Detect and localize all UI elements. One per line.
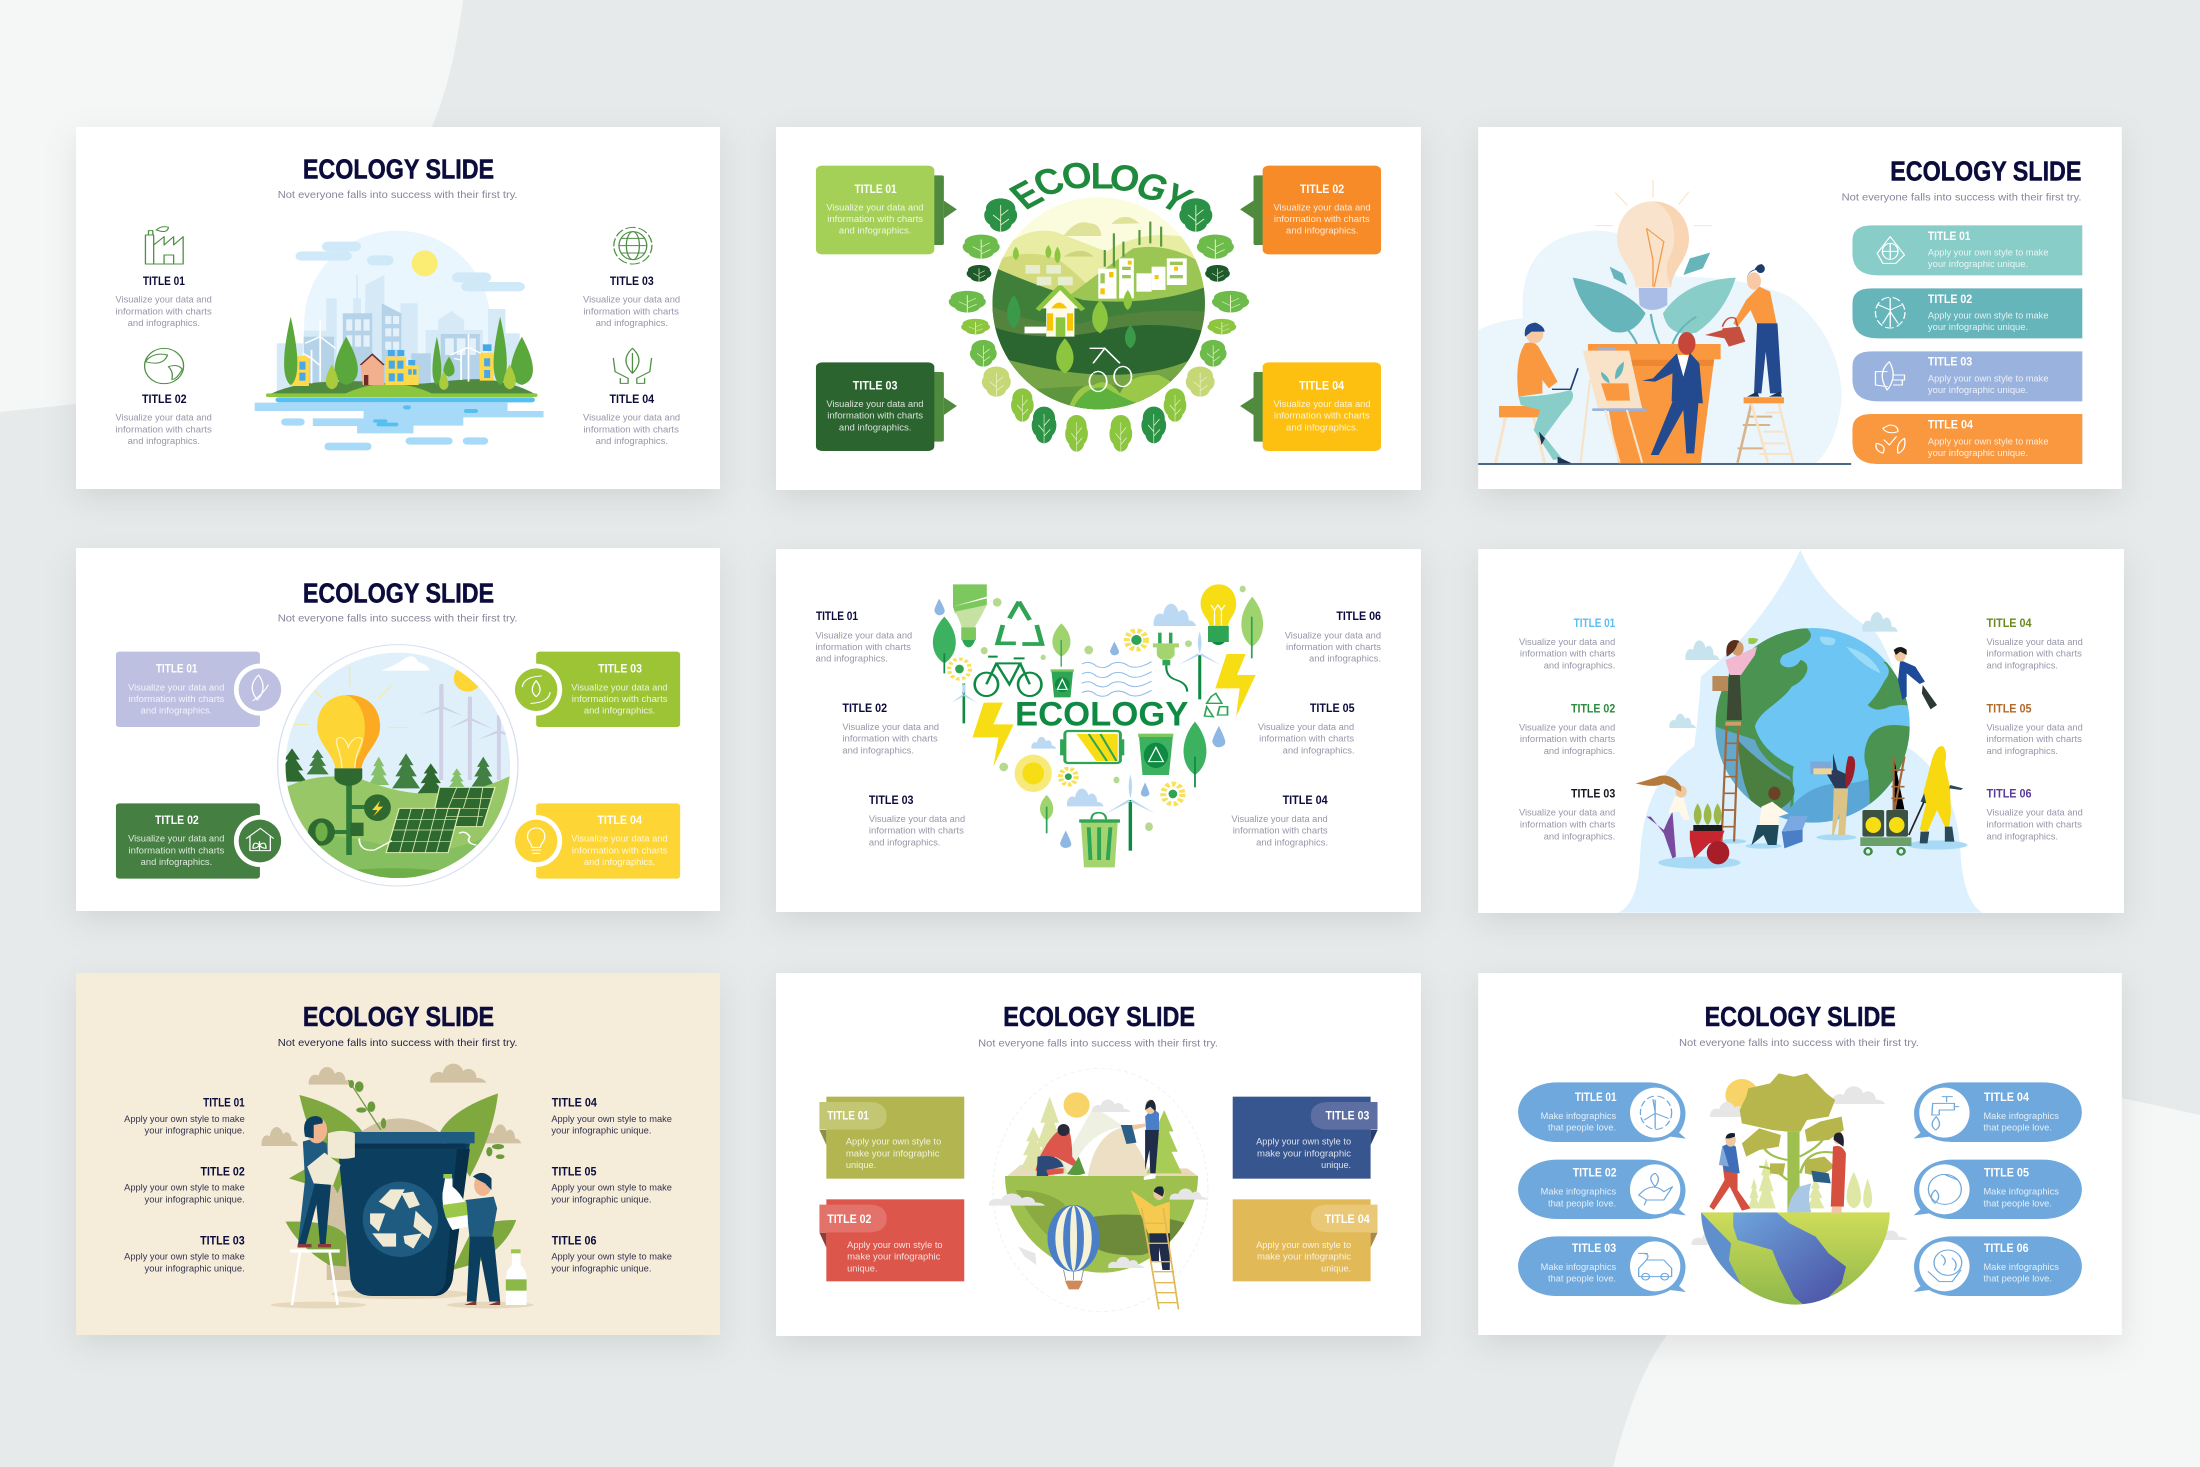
item: title 06: TITLE 06 xyxy=(552,1234,596,1248)
item: title 05 xyxy=(551,1165,672,1205)
item: title 01 xyxy=(1519,617,1616,671)
card: title 03: unique. xyxy=(1321,1160,1351,1171)
card: title 02 xyxy=(1240,166,1381,254)
item: title 04 xyxy=(551,1096,672,1136)
panel 1: city ecology slide xyxy=(76,127,720,489)
panel 2: ecology globe with leaves xyxy=(776,127,1421,490)
item: title 02: and infographics. xyxy=(128,436,200,447)
item: title 01: TITLE 01 xyxy=(1574,617,1615,630)
card: title 03: TITLE 03 xyxy=(598,662,642,676)
bubble: title 06 xyxy=(1914,1236,2082,1296)
item: title 01 xyxy=(116,227,212,329)
heading: ECOLOGY arched: O xyxy=(1057,153,1096,198)
item: title 03: Apply your own style to make xyxy=(124,1252,245,1262)
icon: recycling globe xyxy=(614,227,652,264)
item: title 04: and infographics. xyxy=(1256,838,1328,848)
item: title 06: Visualize your data and xyxy=(1986,808,2083,818)
item: title 04: TITLE 04 xyxy=(609,393,654,406)
item: title 01: Visualize your data and xyxy=(1519,637,1615,648)
card: title 03 xyxy=(816,362,957,451)
card: title 04: make your infographic xyxy=(1257,1252,1352,1262)
bubble: title 06: TITLE 06 xyxy=(1984,1242,2029,1255)
bubble: title 04: that people love. xyxy=(1983,1123,2052,1133)
item: title 06: TITLE 06 xyxy=(1986,787,2032,801)
item: title 01 xyxy=(816,610,912,664)
card: title 04 xyxy=(510,803,680,879)
card: title 04: Apply your own style to xyxy=(1256,1240,1351,1251)
bubble: title 06: that people love. xyxy=(1983,1274,2052,1284)
card: title 03: information with charts xyxy=(827,411,924,421)
item: title 02: TITLE 02 xyxy=(1571,702,1615,716)
item: title 03 xyxy=(869,794,965,848)
bubble: title 05: Make infographics xyxy=(1983,1187,2059,1197)
card: title 02 xyxy=(116,803,286,879)
heading: ECOLOGY arched: E xyxy=(1001,173,1053,218)
card: title 02: information with charts xyxy=(1274,214,1370,225)
item: title 02 xyxy=(1519,702,1616,757)
item: title 03: Visualize your data and xyxy=(1519,808,1615,818)
card: title 02: and infographics. xyxy=(1286,226,1358,236)
item: title 05: TITLE 05 xyxy=(1986,702,2032,716)
heading: ECOLOGY arched: Y xyxy=(1151,176,1200,221)
item: title 03: and infographics. xyxy=(596,318,668,329)
card: title 03: Apply your own style to xyxy=(1256,1137,1351,1147)
heading: ECOLOGY: ECOLOGY xyxy=(1015,694,1189,733)
item: title 05: Apply your own style to make xyxy=(551,1183,672,1193)
item: title 06: information with charts xyxy=(1286,642,1382,653)
card: title 01: unique. xyxy=(846,1160,876,1171)
bar: title 04 xyxy=(1852,414,2082,464)
bubble: title 03: TITLE 03 xyxy=(1572,1242,1616,1255)
card: title 01: Apply your own style to xyxy=(846,1137,941,1147)
card: title 04: TITLE 04 xyxy=(1325,1213,1370,1226)
illustration: green city on island xyxy=(255,231,544,450)
illustration: earth hemisphere with tree xyxy=(1677,1073,1908,1305)
item: title 03 xyxy=(583,227,680,329)
item: title 05: Visualize your data and xyxy=(1258,722,1354,733)
background blob: top left xyxy=(0,0,463,412)
item: title 03: Visualize your data and xyxy=(583,295,680,305)
card: title 03 xyxy=(510,652,680,727)
item: title 04: Visualize your data and xyxy=(1986,637,2083,648)
item: title 05: information with charts xyxy=(1259,734,1355,744)
heading: ECOLOGY SLIDE xyxy=(1705,1001,1896,1032)
bubble: title 05: that people love. xyxy=(1983,1199,2052,1209)
heading: ECOLOGY SLIDE xyxy=(1890,156,2081,187)
subheading: Not everyone falls into success with their first try. xyxy=(278,1037,518,1049)
card: title 02: unique. xyxy=(847,1264,878,1274)
panel 8: planting landscape xyxy=(776,973,1421,1336)
bar: title 02: your infographic unique. xyxy=(1928,322,2028,333)
card: title 02: make your infographic xyxy=(847,1252,941,1262)
bubble: title 01 xyxy=(1518,1082,1686,1142)
bubble: title 03: that people love. xyxy=(1548,1274,1616,1284)
item: title 02: information with charts xyxy=(1520,734,1616,745)
item: title 06 xyxy=(1285,610,1382,664)
card: title 04 xyxy=(1240,362,1381,451)
card: title 04: TITLE 04 xyxy=(597,814,642,827)
item: title 05: Visualize your data and xyxy=(1986,723,2083,733)
item: title 05: and infographics. xyxy=(1986,746,2058,757)
card: title 04: Visualize your data and xyxy=(571,834,668,844)
item: title 02: information with charts xyxy=(116,425,212,435)
item: title 01: and infographics. xyxy=(816,654,888,664)
item: title 03: information with charts xyxy=(869,826,964,836)
bar: title 01: TITLE 01 xyxy=(1928,230,1970,243)
item: title 01 xyxy=(124,1096,245,1136)
item: title 01: TITLE 01 xyxy=(816,610,858,623)
outer ring xyxy=(278,645,518,886)
item: title 03: TITLE 03 xyxy=(200,1234,245,1248)
bubble: title 02 xyxy=(1518,1160,1686,1219)
card: title 02 xyxy=(819,1199,964,1281)
bubble: title 05: TITLE 05 xyxy=(1984,1166,2029,1180)
card: title 02: Apply your own style to xyxy=(847,1240,943,1251)
card: title 04: Visualize your data and xyxy=(1273,399,1371,410)
heading: ECOLOGY SLIDE xyxy=(303,1001,494,1032)
card: title 01: TITLE 01 xyxy=(156,662,197,676)
panel 7: recycling bin xyxy=(76,973,720,1335)
illustration: team growing bulb plant xyxy=(1478,180,1851,465)
bubble: title 02: that people love. xyxy=(1548,1199,1616,1209)
item: title 04: TITLE 04 xyxy=(552,1096,597,1110)
item: title 03: TITLE 03 xyxy=(869,794,914,807)
item: title 05: information with charts xyxy=(1986,734,2082,745)
item: title 04 xyxy=(1231,794,1328,848)
item: title 04: and infographics. xyxy=(596,436,668,447)
item: title 03: information with charts xyxy=(583,307,679,317)
card: title 01: TITLE 01 xyxy=(827,1109,869,1123)
subheading: Not everyone falls into success with their first try. xyxy=(278,189,518,201)
panel 9: earth tree speech bubbles xyxy=(1478,973,2122,1335)
card: title 01: TITLE 01 xyxy=(855,183,897,196)
item: title 02: your infographic unique. xyxy=(145,1195,245,1205)
bar: title 03 xyxy=(1852,351,2082,401)
leaf wreath xyxy=(949,198,1249,452)
bubble: title 04 xyxy=(1914,1082,2082,1142)
card: title 03: TITLE 03 xyxy=(853,379,898,393)
bar: title 02: Apply your own style to make xyxy=(1928,311,2048,321)
subheading: Not everyone falls into success with their first try. xyxy=(1842,192,2081,203)
card: title 01 xyxy=(816,166,957,254)
illustration: globe landscape xyxy=(990,197,1207,410)
item: title 01: information with charts xyxy=(1520,649,1616,659)
card: title 02: TITLE 02 xyxy=(155,814,199,827)
item: title 04: and infographics. xyxy=(1986,661,2058,671)
card: title 03: Visualize your data and xyxy=(826,399,923,410)
bubble: title 01: Make infographics xyxy=(1541,1111,1617,1122)
subheading: Not everyone falls into success with their first try. xyxy=(978,1038,1218,1049)
item: title 02: Visualize your data and xyxy=(842,722,939,733)
panel 5: ecology heart xyxy=(776,549,1421,912)
illustration: solar field and bulb xyxy=(277,652,520,880)
bar: title 04: your infographic unique. xyxy=(1928,448,2028,459)
item: title 06: information with charts xyxy=(1986,820,2082,830)
card: title 01: Visualize your data and xyxy=(128,683,224,693)
item: title 01: and infographics. xyxy=(1544,661,1615,671)
card: title 04: and infographics. xyxy=(584,857,655,868)
subheading: Not everyone falls into success with their first try. xyxy=(278,613,518,624)
subheading: Not everyone falls into success with their first try. xyxy=(1679,1037,1919,1049)
icon: factory xyxy=(145,227,183,264)
card: title 01: Visualize your data and xyxy=(826,203,923,213)
item: title 01: information with charts xyxy=(816,642,911,653)
bar: title 01: Apply your own style to make xyxy=(1928,248,2048,258)
item: title 04: Visualize your data and xyxy=(1231,814,1328,825)
heading: ECOLOGY arched: L xyxy=(1090,155,1114,196)
item: title 02: TITLE 02 xyxy=(142,393,187,406)
item: title 06: TITLE 06 xyxy=(1336,610,1381,623)
item: title 02: and infographics. xyxy=(842,746,914,756)
panel 3: teamwork around idea plant xyxy=(1478,127,2122,489)
heading: ECOLOGY SLIDE xyxy=(1003,1001,1195,1032)
item: title 04: Visualize your data and xyxy=(583,413,680,423)
card: title 04: unique. xyxy=(1321,1264,1351,1274)
bar: title 01 xyxy=(1852,225,2082,275)
heading: ECOLOGY SLIDE xyxy=(303,154,494,185)
item: title 04: information with charts xyxy=(1986,649,2082,659)
item: title 06: your infographic unique. xyxy=(551,1264,652,1274)
item: title 03: and infographics. xyxy=(869,838,940,848)
panel 6: people caring for earth xyxy=(1478,549,2124,913)
icons: heart collage xyxy=(933,584,1263,867)
card: title 02: TITLE 02 xyxy=(827,1213,871,1226)
item: title 03: TITLE 03 xyxy=(1571,787,1615,801)
item: title 02: Visualize your data and xyxy=(1519,723,1615,733)
card: title 03: and infographics. xyxy=(839,423,911,433)
card: title 02: TITLE 02 xyxy=(1300,183,1344,196)
item: title 02: TITLE 02 xyxy=(842,702,887,715)
item: title 04: Apply your own style to make xyxy=(551,1114,672,1125)
card: title 02: Visualize your data and xyxy=(1273,203,1371,213)
bubble: title 02: TITLE 02 xyxy=(1573,1166,1617,1180)
card: title 03: Visualize your data and xyxy=(571,683,668,693)
item: title 04: information with charts xyxy=(1233,826,1328,836)
item: title 06 xyxy=(551,1234,672,1274)
heading: ECOLOGY SLIDE xyxy=(303,577,494,608)
bar: title 03: your infographic unique. xyxy=(1928,385,2028,396)
background blob: bottom right xyxy=(1613,1098,2200,1467)
bubble: title 01: TITLE 01 xyxy=(1575,1091,1617,1104)
card: title 01: make your infographic xyxy=(846,1149,940,1159)
item: title 06: and infographics. xyxy=(1309,654,1381,664)
item: title 01: TITLE 01 xyxy=(143,275,185,288)
card: title 04: and infographics. xyxy=(1286,423,1358,433)
illustration: figures around earth xyxy=(1636,638,1967,869)
bar: title 02: TITLE 02 xyxy=(1928,293,1972,306)
card: title 01 xyxy=(116,652,286,727)
bar: title 03: Apply your own style to make xyxy=(1928,374,2048,384)
bar: title 03: TITLE 03 xyxy=(1928,355,1972,369)
item: title 02: Apply your own style to make xyxy=(124,1183,245,1193)
card: title 01: and infographics. xyxy=(141,706,212,716)
bubble: title 02: Make infographics xyxy=(1541,1187,1617,1197)
item: title 05 xyxy=(1986,702,2083,757)
card: title 03: TITLE 03 xyxy=(1326,1109,1369,1123)
item: title 05: TITLE 05 xyxy=(552,1165,596,1179)
panel 4: renewable energy bulb xyxy=(76,548,720,911)
bubble: title 03 xyxy=(1518,1236,1686,1296)
card: title 04 xyxy=(1233,1199,1378,1281)
illustration: earth globe xyxy=(1669,612,1910,823)
item: title 06: Visualize your data and xyxy=(1285,631,1381,641)
heading: ECOLOGY arched: G xyxy=(1129,164,1176,210)
item: title 02 xyxy=(124,1165,245,1205)
item: title 02: information with charts xyxy=(842,734,938,744)
card: title 02: information with charts xyxy=(129,846,225,856)
card: title 03: information with charts xyxy=(572,694,668,705)
card: title 02: Visualize your data and xyxy=(128,834,224,844)
illustration: recycling bin with people xyxy=(262,1064,534,1308)
item: title 02: TITLE 02 xyxy=(201,1165,245,1179)
item: title 02: and infographics. xyxy=(1544,746,1615,757)
bubble: title 04: Make infographics xyxy=(1983,1111,2059,1122)
item: title 02 xyxy=(842,702,939,756)
card: title 04: information with charts xyxy=(1274,411,1370,421)
item: title 06: Apply your own style to make xyxy=(551,1252,672,1262)
illustration: buildings and house xyxy=(1007,217,1187,391)
item: title 02: Visualize your data and xyxy=(116,413,212,423)
card: title 01: information with charts xyxy=(827,214,924,225)
card: title 02: and infographics. xyxy=(141,857,212,868)
card: title 01 xyxy=(819,1097,964,1179)
icon: hands with leaf xyxy=(613,348,652,383)
item: title 01: TITLE 01 xyxy=(203,1096,245,1110)
item: title 05 xyxy=(1258,702,1355,756)
card: title 03 xyxy=(1233,1097,1378,1179)
card: title 03: make your infographic xyxy=(1257,1149,1352,1159)
item: title 04: information with charts xyxy=(583,425,679,435)
bar: title 04: TITLE 04 xyxy=(1928,418,1973,432)
heading: ECOLOGY arched xyxy=(1001,153,1200,221)
item: title 01: Visualize your data and xyxy=(116,295,212,305)
item: title 04: your infographic unique. xyxy=(551,1126,652,1136)
icon: earth with leaf xyxy=(145,348,184,384)
water drop background xyxy=(1618,550,1983,913)
item: title 06 xyxy=(1986,787,2083,842)
card: title 01: information with charts xyxy=(129,694,225,705)
card: title 04: TITLE 04 xyxy=(1299,379,1344,393)
item: title 05: TITLE 05 xyxy=(1310,702,1355,715)
item: title 01: your infographic unique. xyxy=(145,1126,245,1136)
item: title 03: Visualize your data and xyxy=(869,814,965,825)
item: title 03: information with charts xyxy=(1520,820,1616,830)
item: title 01: information with charts xyxy=(116,307,212,317)
bubble: title 01: that people love. xyxy=(1548,1123,1616,1133)
item: title 04: TITLE 04 xyxy=(1986,617,2032,630)
bar: title 01: your infographic unique. xyxy=(1928,259,2028,270)
item: title 06: and infographics. xyxy=(1986,832,2058,842)
card: title 04: information with charts xyxy=(572,846,668,856)
bubble: title 06: Make infographics xyxy=(1983,1262,2059,1273)
card: title 01: and infographics. xyxy=(839,226,911,236)
panel shadows xyxy=(76,137,2124,1346)
bubble: title 04: TITLE 04 xyxy=(1984,1091,2029,1104)
item: title 03 xyxy=(124,1234,245,1274)
item: title 03: TITLE 03 xyxy=(610,275,654,288)
item: title 05: your infographic unique. xyxy=(551,1195,652,1205)
bar: title 02 xyxy=(1852,288,2082,338)
item: title 03: and infographics. xyxy=(1544,832,1615,842)
item: title 04 xyxy=(1986,617,2083,671)
item: title 03: your infographic unique. xyxy=(145,1264,245,1274)
item: title 01: Apply your own style to make xyxy=(124,1114,245,1125)
bubble: title 05 xyxy=(1914,1160,2082,1219)
item: title 04: TITLE 04 xyxy=(1283,794,1328,807)
item: title 02 xyxy=(116,348,212,447)
item: title 03 xyxy=(1519,787,1616,842)
card: title 03: and infographics. xyxy=(584,706,655,716)
illustration: hemisphere landscape xyxy=(989,1068,1208,1312)
bubble: title 03: Make infographics xyxy=(1541,1262,1617,1273)
item: title 04 xyxy=(583,348,680,447)
heading: ECOLOGY arched: C xyxy=(1026,159,1071,205)
heading: ECOLOGY arched: O xyxy=(1107,156,1142,200)
item: title 01: Visualize your data and xyxy=(816,631,912,641)
bar: title 04: Apply your own style to make xyxy=(1928,437,2048,447)
item: title 01: and infographics. xyxy=(128,318,200,329)
item: title 05: and infographics. xyxy=(1283,746,1355,756)
